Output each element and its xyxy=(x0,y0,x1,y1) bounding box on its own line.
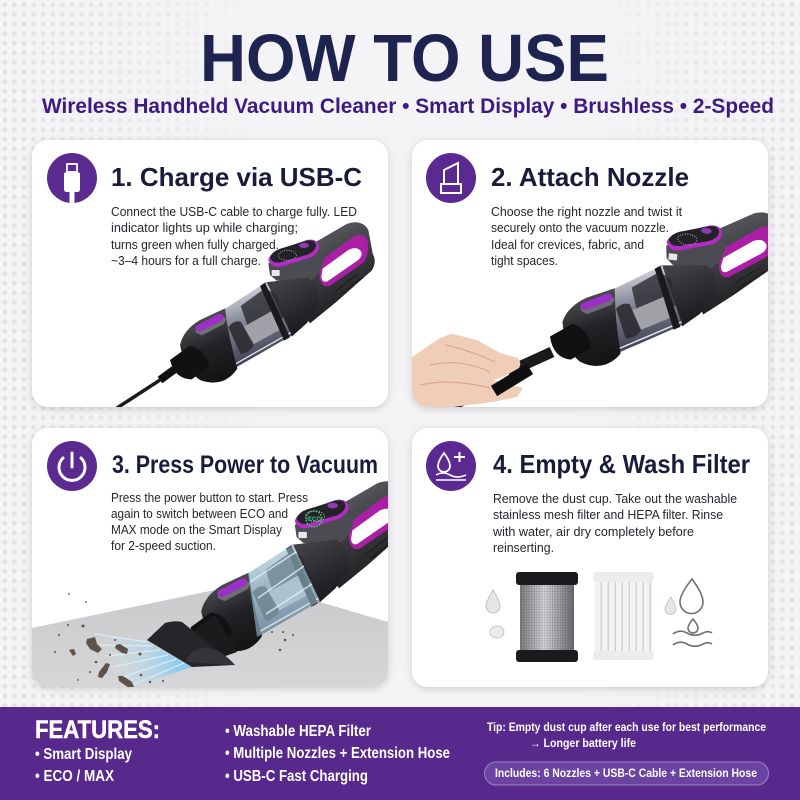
floor scene with vacuum: ECO xyxy=(308,517,321,523)
floor scene with vacuum xyxy=(32,481,408,688)
text block xyxy=(492,492,737,555)
features heading: FEATURES: xyxy=(35,716,160,744)
text block: tight spaces. xyxy=(491,254,558,268)
features column 1: • ECO / MAX xyxy=(35,768,115,785)
heading: 3. Press Power to Vacuum xyxy=(112,451,378,479)
text block: with water, air dry completely before xyxy=(492,525,694,539)
icon: nozzle xyxy=(426,153,476,203)
panel: features footer xyxy=(0,707,800,800)
text block: indicator lights up while charging; xyxy=(111,221,298,235)
text block: MAX mode on the Smart Display xyxy=(111,523,283,537)
text block: Connect the USB-C cable to charge fully. LED xyxy=(111,205,357,219)
features column 2: • Washable HEPA Filter xyxy=(225,723,371,740)
text block: securely onto the vacuum nozzle. xyxy=(491,221,669,235)
text block: Ideal for crevices, fabric, and xyxy=(491,238,644,252)
tip: Tip: Empty dust cup after each use for best performance xyxy=(487,720,766,734)
water droplets xyxy=(486,590,676,638)
heading: 4. Empty & Wash Filter xyxy=(493,449,750,479)
features column 2: • Multiple Nozzles + Extension Hose xyxy=(225,745,450,762)
icon: usb-c cable xyxy=(47,153,97,203)
text block: Remove the dust cup. Take out the washable xyxy=(493,492,737,506)
icon: drops and waves xyxy=(673,579,712,646)
icon: water xyxy=(426,441,476,491)
vacuum with charging cable xyxy=(117,222,375,408)
text block: ~3–4 hours for a full charge. xyxy=(111,254,261,268)
icon: power xyxy=(47,441,97,491)
text block: again to switch between ECO and xyxy=(111,507,288,521)
panel: step 4 wash xyxy=(412,428,768,687)
includes pill xyxy=(484,762,768,785)
panel: step 2 nozzle xyxy=(410,140,784,408)
subtitle: Wireless Handheld Vacuum Cleaner • Smart Display • Brushless • 2-Speed xyxy=(42,95,774,118)
panel: step 3 power xyxy=(32,428,408,688)
debris xyxy=(54,593,294,688)
text block xyxy=(111,205,357,268)
features column 2: • USB-C Fast Charging xyxy=(225,768,368,785)
text block xyxy=(491,205,683,268)
panel: step 1 charge xyxy=(32,140,388,408)
text block: Choose the right nozzle and twist it xyxy=(491,205,683,219)
white hepa filter xyxy=(593,572,654,660)
features column 1 xyxy=(35,746,132,785)
vacuum with hand and nozzle xyxy=(412,212,768,407)
tip: → Longer battery life xyxy=(530,736,636,750)
text block: stainless mesh filter and HEPA filter. Rinse xyxy=(493,508,723,522)
heading: 1. Charge via USB-C xyxy=(111,162,362,192)
text block: turns green when fully charged. xyxy=(111,238,279,252)
text block: Press the power button to start. Press xyxy=(111,491,308,505)
heading: 2. Attach Nozzle xyxy=(491,162,689,192)
tip xyxy=(487,720,766,750)
text block: reinserting. xyxy=(493,541,554,555)
features column 1: • Smart Display xyxy=(35,746,132,763)
title: HOW TO USE xyxy=(200,21,609,96)
steel mesh filter xyxy=(516,572,578,662)
text block: for 2-speed suction. xyxy=(111,539,216,553)
features column 2 xyxy=(225,723,450,785)
includes pill: Includes: 6 Nozzles + USB-C Cable + Extension Hose xyxy=(495,766,757,780)
text block xyxy=(111,491,308,553)
